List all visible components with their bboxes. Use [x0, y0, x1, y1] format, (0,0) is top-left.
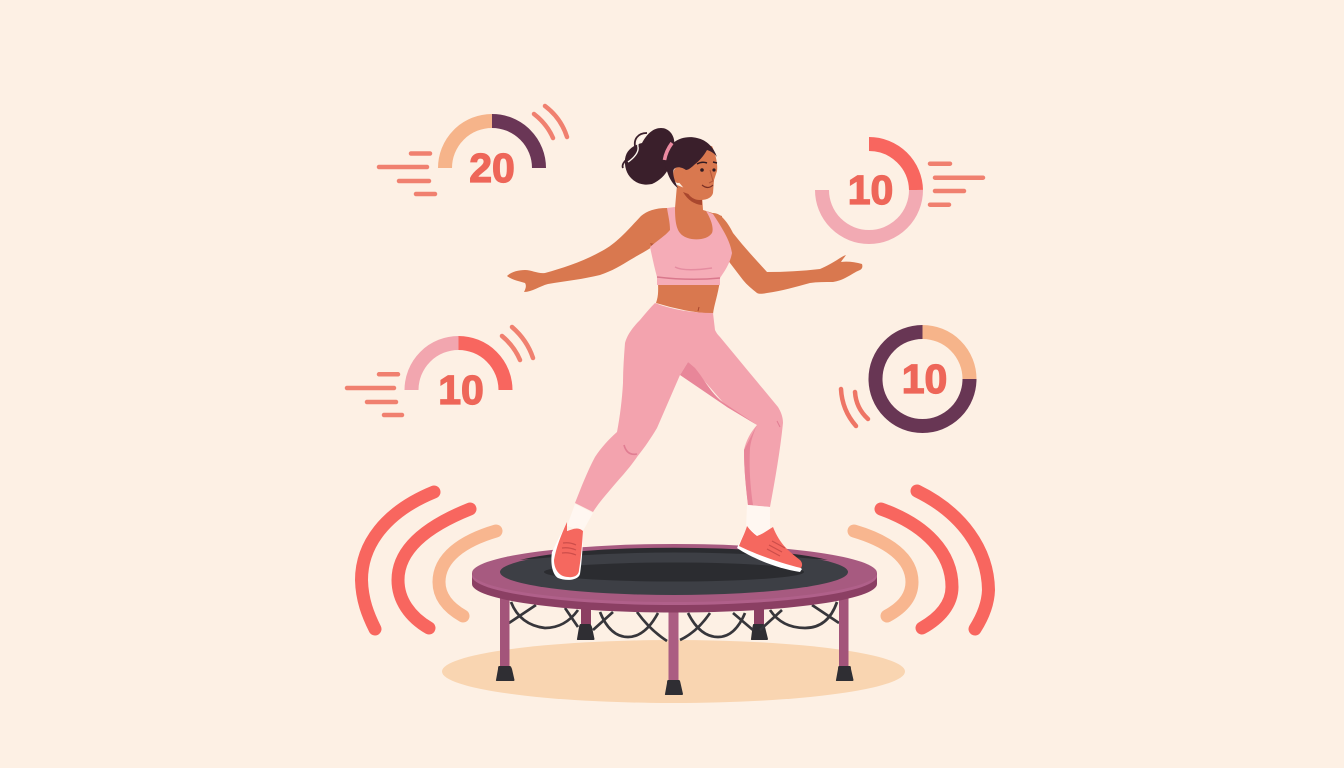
gauge: 10 middle right: 10 — [902, 356, 947, 402]
navel — [698, 307, 699, 311]
neck and chest — [660, 185, 722, 244]
face — [677, 146, 717, 200]
neck shadow — [683, 192, 702, 205]
gauge: 10 middle left — [347, 327, 533, 415]
leggings — [575, 303, 783, 512]
gauge: 20 top left — [379, 106, 567, 194]
jump mat — [500, 548, 848, 595]
woman jumping — [507, 128, 862, 580]
midriff — [656, 280, 720, 314]
gauge: 20 top left: 20 — [469, 145, 515, 191]
hair — [665, 137, 717, 188]
ear — [673, 167, 683, 183]
sports top — [650, 207, 732, 285]
floor shadow — [442, 640, 905, 703]
hair tie — [664, 143, 672, 160]
bounce waves: right — [854, 491, 988, 629]
left arm — [507, 208, 680, 292]
bounce waves: left — [362, 492, 496, 629]
gauge: 10 middle right — [841, 332, 970, 426]
left shoe — [551, 522, 583, 580]
back legs — [577, 606, 768, 640]
frame rim — [472, 544, 877, 612]
facial features — [697, 162, 717, 188]
right arm — [713, 213, 862, 294]
gauge: 10 middle left: 10 — [438, 367, 484, 413]
gauge: 10 top right — [822, 144, 983, 237]
front legs — [496, 598, 854, 695]
bungee cords — [509, 602, 839, 641]
gauge: 10 top right: 10 — [848, 167, 893, 213]
hair bun — [623, 128, 674, 185]
right shoe — [737, 526, 802, 572]
trampoline — [472, 544, 877, 695]
arm shadow — [650, 243, 660, 256]
socks — [567, 504, 770, 537]
